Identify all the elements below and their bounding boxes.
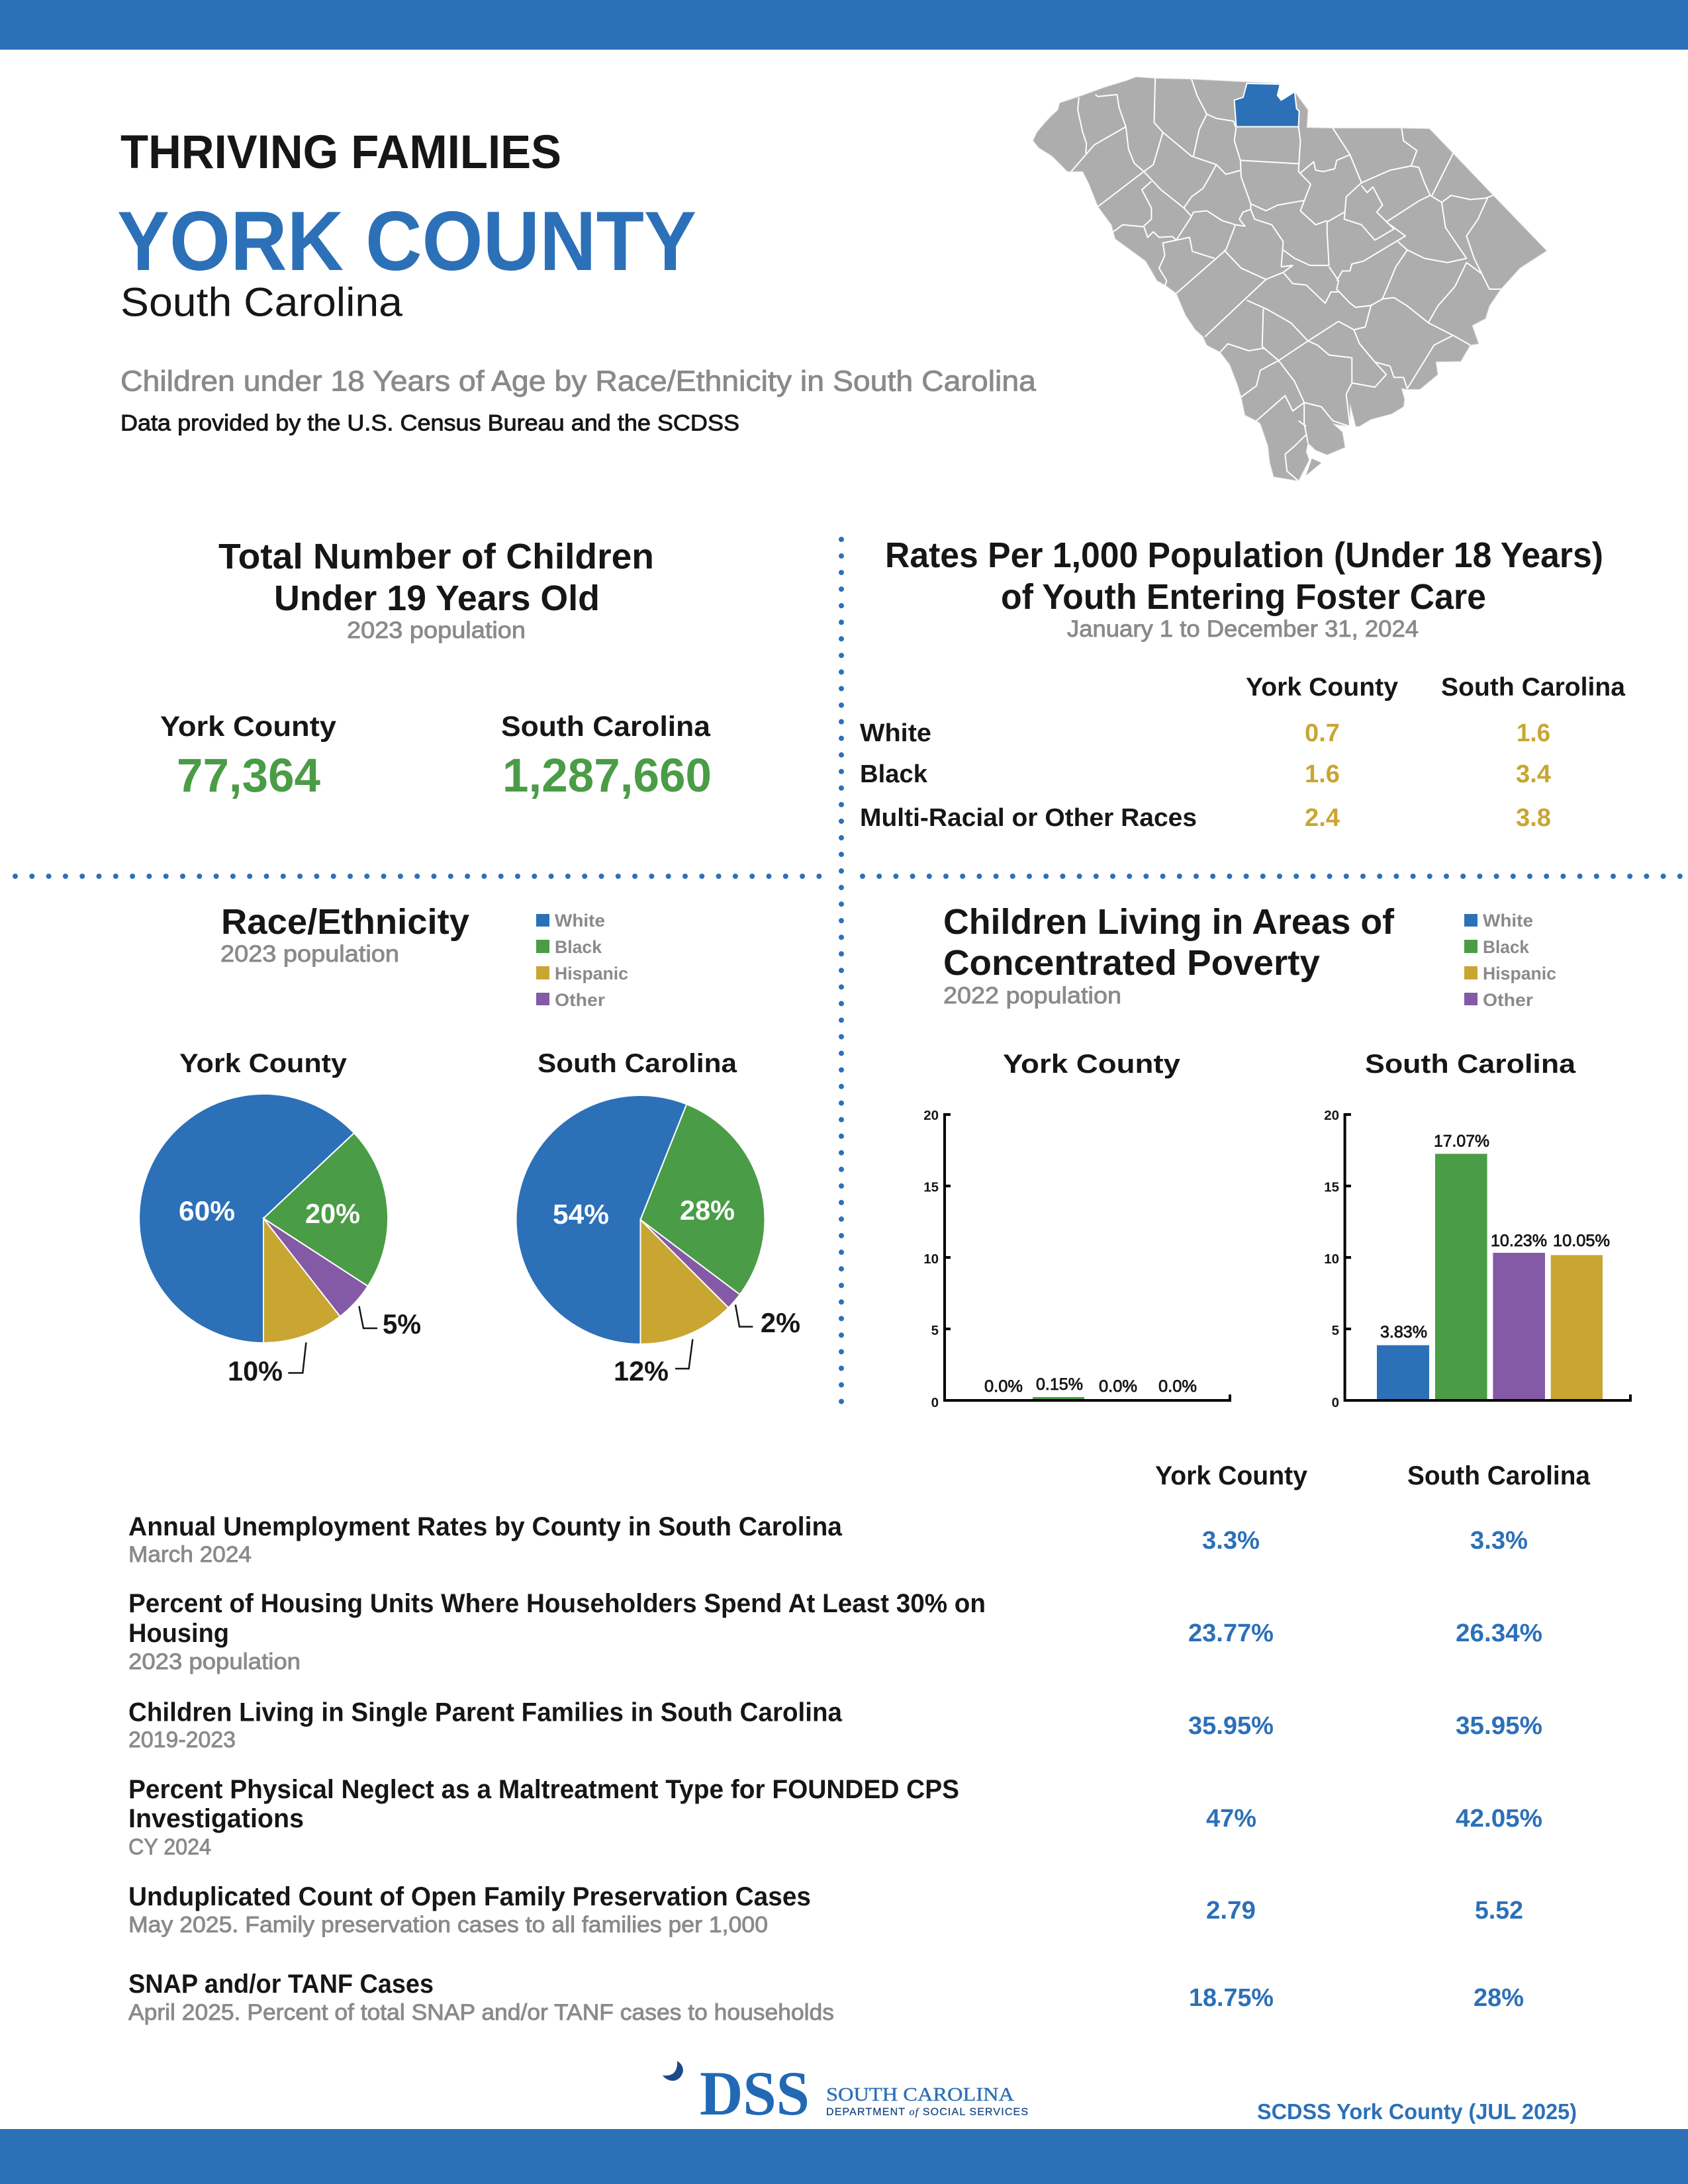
row: single parent families bbox=[128, 1698, 1542, 1752]
row: housing: 23.77% bbox=[1188, 1619, 1274, 1647]
heading: Total Number of Children bbox=[218, 537, 654, 576]
bar chart: South Carolina: 20 bbox=[1324, 1108, 1339, 1123]
panel: total number of children bbox=[160, 537, 712, 802]
pie chart: York County: 10% bbox=[228, 1355, 283, 1387]
row: family preservation bbox=[128, 1882, 1523, 1938]
row: family preservation: 5.52 bbox=[1475, 1897, 1523, 1925]
heading line 2: of Youth Entering Foster Care bbox=[1001, 577, 1486, 617]
row: SNAP and TANF: 18.75% bbox=[1189, 1984, 1274, 2012]
row: SNAP and TANF: April 2025. Percent of total SNAP and/or TANF cases to households bbox=[128, 2000, 834, 2025]
bar chart: York County: 0.0% bbox=[1099, 1377, 1137, 1396]
row: single parent families: Children Living in Single Parent Families in South Carolina bbox=[128, 1698, 843, 1727]
heading line 2: Under 19 Years Old bbox=[274, 578, 600, 618]
icon: crescent moon bbox=[663, 2061, 683, 2081]
vertical dotted divider bbox=[839, 539, 844, 1408]
row: housing bbox=[128, 1589, 1542, 1674]
row: single parent families: 35.95% bbox=[1456, 1712, 1542, 1740]
bar chart: South Carolina bbox=[1324, 1108, 1630, 1410]
row: physical neglect: 47% bbox=[1206, 1805, 1256, 1833]
row: physical neglect bbox=[128, 1775, 1542, 1860]
column header: South Carolina: South Carolina bbox=[1441, 673, 1625, 702]
row: Multi-Racial: Multi-Racial or Other Races bbox=[860, 804, 1197, 832]
row: single parent families: 2019-2023 bbox=[128, 1727, 236, 1752]
description line: Children under 18 Years of Age by Race/Ethnicity in South Carolina bbox=[120, 365, 1037, 397]
heading line 2: Concentrated Poverty bbox=[943, 943, 1320, 983]
legend: White bbox=[555, 911, 605, 931]
bar chart: South Carolina: 0 bbox=[1332, 1395, 1339, 1410]
value: 2.4 bbox=[1305, 804, 1340, 832]
value: 1.6 bbox=[1517, 719, 1550, 747]
footer credit: SCDSS York County (JUL 2025) bbox=[1257, 2099, 1577, 2124]
title: Thriving Families: THRIVING FAMILIES bbox=[120, 126, 561, 179]
row: SNAP and TANF: 28% bbox=[1474, 1984, 1524, 2012]
column header: South Carolina: South Carolina bbox=[1407, 1461, 1591, 1490]
column header: York County: York County bbox=[1246, 673, 1398, 702]
logo line 2: DEPARTMENT of SOCIAL SERVICES bbox=[826, 2107, 1028, 2118]
number: York County: 77,364 bbox=[177, 750, 321, 802]
bar chart: York County: 0.15% bbox=[1036, 1375, 1083, 1394]
value: 1.6 bbox=[1305, 760, 1340, 788]
pie chart: South Carolina: 28% bbox=[680, 1195, 735, 1226]
row: family preservation: May 2025. Family preservation cases to all families per 1,000 bbox=[128, 1913, 768, 1938]
subheading: 2022 population bbox=[943, 983, 1121, 1009]
pie chart: South Carolina bbox=[516, 1095, 800, 1387]
heading: Race/Ethnicity bbox=[221, 902, 469, 942]
row: unemployment: 3.3% bbox=[1470, 1527, 1528, 1555]
map: South Carolina counties with York County highlighted bbox=[1033, 77, 1547, 482]
logo letters: DSS bbox=[700, 2058, 810, 2128]
bottom banner bbox=[0, 2129, 1688, 2184]
legend: Hispanic bbox=[555, 964, 628, 983]
heading: Children Living in Areas of bbox=[943, 902, 1395, 942]
row: family preservation: Unduplicated Count of Open Family Preservation Cases bbox=[128, 1882, 811, 1911]
value: 3.8 bbox=[1516, 804, 1551, 832]
bar chart: South Carolina: 10.05% bbox=[1553, 1232, 1610, 1250]
subheading: 2023 population bbox=[220, 941, 399, 967]
panel: race/ethnicity bbox=[139, 902, 800, 1387]
row: housing: 2023 population bbox=[128, 1649, 301, 1674]
bar chart: South Carolina: 15 bbox=[1324, 1179, 1339, 1195]
legend bbox=[1464, 911, 1556, 1010]
label: South Carolina: South Carolina bbox=[501, 711, 711, 743]
pie chart: South Carolina: 54% bbox=[553, 1199, 609, 1230]
bar chart: South Carolina: 3.83% bbox=[1380, 1323, 1427, 1342]
pie title: York County: York County bbox=[179, 1049, 348, 1078]
panel: foster care rates bbox=[860, 535, 1625, 832]
row: physical neglect: 42.05% bbox=[1456, 1805, 1542, 1833]
pie chart: York County: 20% bbox=[305, 1198, 360, 1229]
horizontal dotted divider right bbox=[863, 874, 1685, 879]
panel: concentrated poverty bbox=[923, 902, 1630, 1410]
logo: SC DSS bbox=[663, 2058, 1028, 2128]
row: physical neglect: CY 2024 bbox=[128, 1835, 211, 1860]
row: housing: Housing bbox=[128, 1619, 229, 1648]
row: unemployment bbox=[128, 1512, 1528, 1567]
subtitle: South Carolina: South Carolina bbox=[120, 279, 402, 324]
row: family preservation: 2.79 bbox=[1206, 1897, 1256, 1925]
row: Black: Black bbox=[860, 760, 928, 788]
title: York County: YORK COUNTY bbox=[117, 194, 696, 288]
pie chart: York County: 60% bbox=[179, 1195, 235, 1226]
row: physical neglect: Percent Physical Neglect as a Maltreatment Type for FOUNDED CPS bbox=[128, 1775, 959, 1804]
subheading: January 1 to December 31, 2024 bbox=[1067, 616, 1419, 642]
value: 3.4 bbox=[1516, 760, 1551, 788]
legend: Black bbox=[1483, 937, 1530, 957]
heading: Rates Per 1,000 Population (Under 18 Years) bbox=[885, 535, 1603, 575]
label: York County: York County bbox=[160, 711, 336, 743]
bar chart: York County: 20 bbox=[923, 1108, 939, 1123]
row: single parent families: 35.95% bbox=[1188, 1712, 1274, 1740]
row: physical neglect: Investigations bbox=[128, 1804, 304, 1833]
logo line 1: SOUTH CAROLINA bbox=[826, 2085, 1014, 2105]
legend: Other bbox=[555, 990, 606, 1010]
bar chart: South Carolina: 5 bbox=[1332, 1323, 1339, 1338]
subheading: 2023 population bbox=[347, 617, 526, 643]
chart title: York County: York County bbox=[1003, 1050, 1181, 1079]
bar chart: South Carolina: 10.23% bbox=[1491, 1232, 1547, 1250]
row: White: White bbox=[860, 719, 931, 747]
bar chart: York County bbox=[923, 1108, 1230, 1410]
column header: York County: York County bbox=[1155, 1461, 1308, 1490]
legend: White bbox=[1483, 911, 1533, 931]
bar chart: York County: 0.0% bbox=[1158, 1377, 1197, 1396]
pie chart: York County: 5% bbox=[383, 1308, 421, 1340]
row: housing: 26.34% bbox=[1456, 1619, 1542, 1647]
bar chart: South Carolina: 10 bbox=[1324, 1251, 1339, 1267]
bar chart: York County: 5 bbox=[931, 1323, 939, 1338]
legend: Hispanic bbox=[1483, 964, 1556, 983]
horizontal dotted divider left bbox=[15, 874, 821, 879]
row: SNAP and TANF bbox=[128, 1970, 1524, 2025]
row: unemployment: 3.3% bbox=[1202, 1527, 1260, 1555]
pie title: South Carolina: South Carolina bbox=[538, 1049, 737, 1078]
number: South Carolina: 1,287,660 bbox=[502, 750, 712, 802]
legend: Black bbox=[555, 937, 602, 957]
row: unemployment: March 2024 bbox=[128, 1542, 252, 1567]
pie chart: South Carolina: 12% bbox=[614, 1355, 669, 1387]
bar chart: York County: 0 bbox=[931, 1395, 939, 1410]
row: housing: Percent of Housing Units Where Householders Spend At Least 30% on bbox=[128, 1589, 986, 1618]
pie chart: York County bbox=[139, 1094, 421, 1387]
value: 0.7 bbox=[1305, 719, 1340, 747]
chart title: South Carolina: South Carolina bbox=[1365, 1050, 1576, 1079]
bar chart: York County: 0.0% bbox=[984, 1377, 1023, 1396]
legend: Other bbox=[1483, 990, 1534, 1010]
data source line: Data provided by the U.S. Census Bureau and the SCDSS bbox=[120, 410, 739, 435]
pie chart: South Carolina: 2% bbox=[761, 1307, 800, 1338]
header text block bbox=[117, 126, 1037, 435]
panel: indicators table bbox=[128, 1461, 1591, 2025]
bar chart: York County: 10 bbox=[923, 1251, 939, 1267]
bar chart: South Carolina: 17.07% bbox=[1434, 1132, 1489, 1150]
row: SNAP and TANF: SNAP and/or TANF Cases bbox=[128, 1970, 434, 1999]
row: unemployment: Annual Unemployment Rates by County in South Carolina bbox=[128, 1512, 843, 1541]
bar chart: York County: 15 bbox=[923, 1179, 939, 1195]
legend bbox=[536, 911, 628, 1010]
top banner bbox=[0, 0, 1688, 50]
